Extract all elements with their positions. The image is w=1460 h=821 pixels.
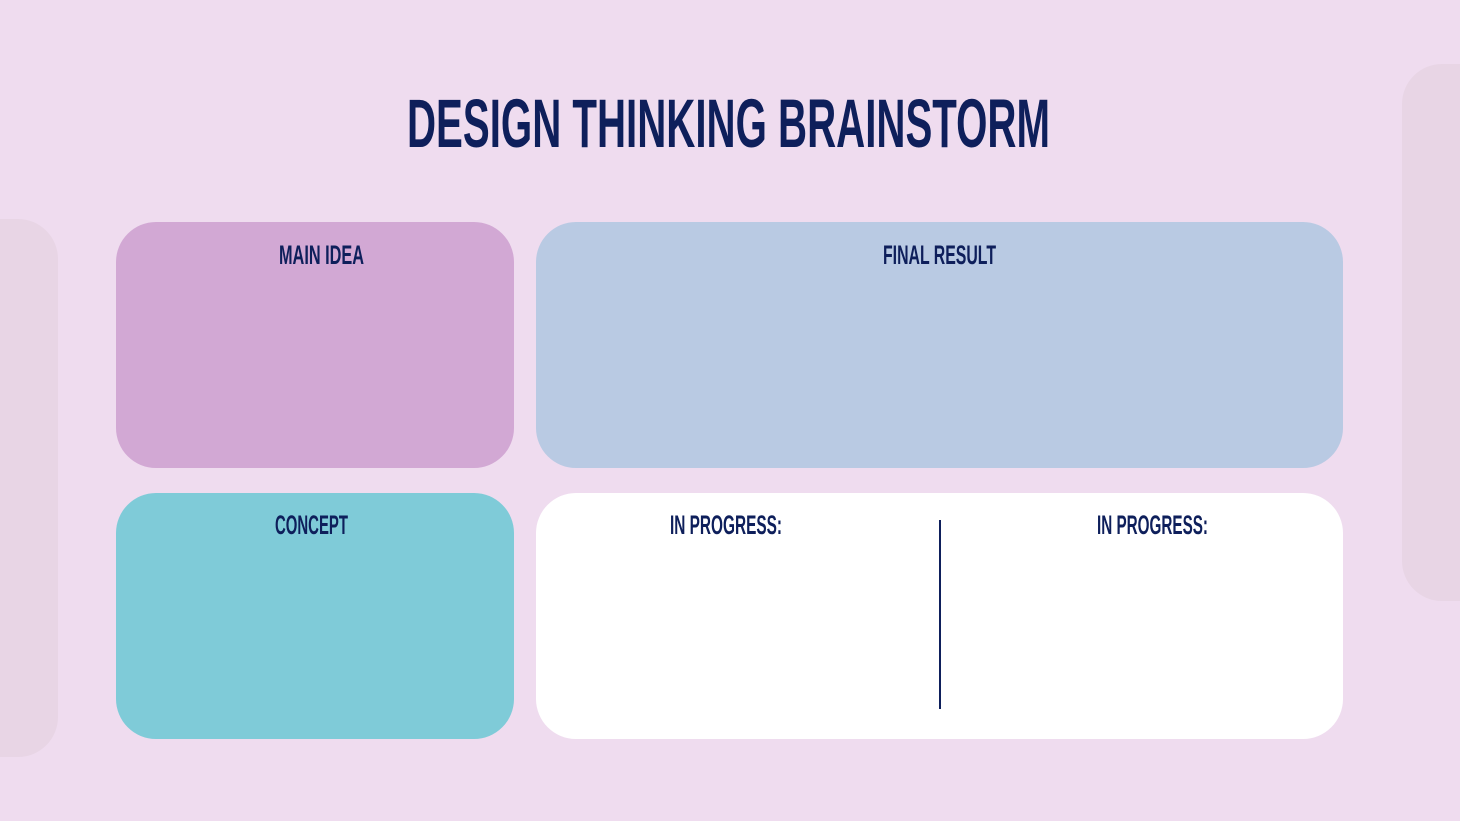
panel: concept	[116, 493, 514, 739]
heading: main idea: MAIN IDEA	[279, 240, 364, 270]
heading: in progress left: IN PROGRESS:	[670, 510, 782, 540]
panel: final result	[536, 222, 1343, 468]
panel: main idea	[116, 222, 514, 468]
heading: concept: CONCEPT	[275, 510, 348, 540]
heading: in progress right: IN PROGRESS:	[1097, 510, 1208, 540]
decorative left panel	[0, 219, 58, 757]
decorative right panel	[1402, 64, 1460, 601]
heading: final result: FINAL RESULT	[883, 240, 996, 270]
panel: in progress	[536, 493, 1343, 739]
